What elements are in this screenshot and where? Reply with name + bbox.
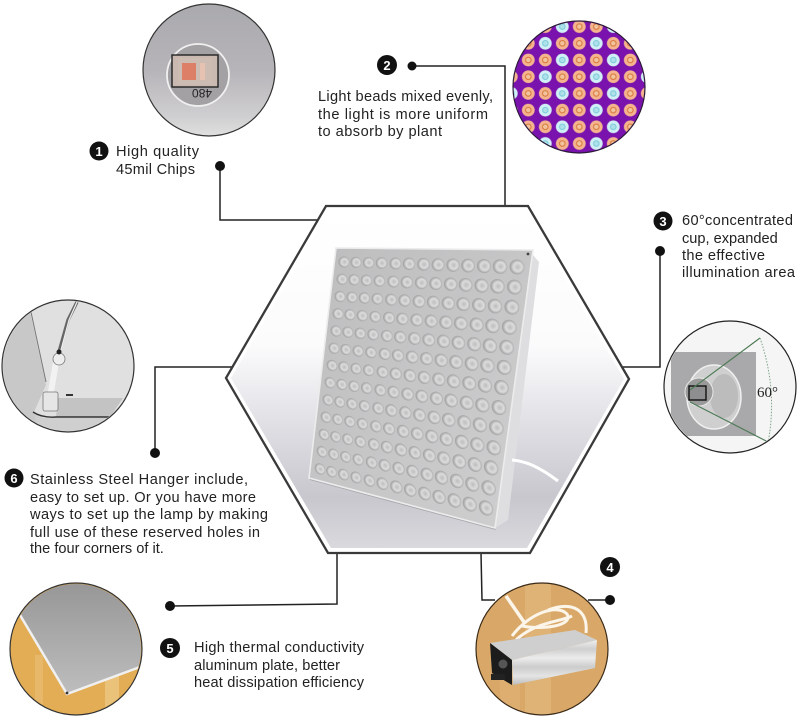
feature 2 text: Light beads mixed evenly, [318, 89, 493, 105]
feature 5 text: heat dissipation efficiency [194, 675, 365, 691]
feature 6 text [29, 472, 268, 557]
connector lines [155, 66, 660, 606]
number 2 badge [377, 55, 397, 75]
60 degree cup photo circle: 60° [757, 385, 778, 401]
feature 2 text: to absorb by plant [318, 124, 442, 140]
feature 6 text: ways to set up the lamp by making [29, 507, 268, 523]
central hexagon panel [226, 206, 629, 553]
number 6 badge: 6 [10, 471, 18, 486]
feature 3 text [682, 213, 796, 281]
feature 2 text: the light is more uniform [318, 107, 488, 123]
number 3 badge [654, 212, 672, 230]
number 3 badge: 3 [659, 214, 667, 229]
LED beads photo circle [513, 21, 645, 153]
feature 3 text: cup, expanded [682, 231, 778, 247]
feature 6 text: Stainless Steel Hanger include, [30, 472, 248, 488]
feature 1 text: 45mil Chips [116, 162, 195, 178]
number 5 badge: 5 [166, 641, 174, 656]
60 degree cup photo circle [664, 321, 796, 453]
connector dot 3 [655, 246, 665, 256]
LED grow light panel [309, 248, 558, 530]
feature 3 text: illumination area [682, 265, 796, 281]
connector dot 5 [165, 601, 175, 611]
feature 1 text: High quality [116, 144, 200, 160]
feature 6 text: full use of these reserved holes in [30, 525, 260, 541]
feature 6 text: the four corners of it. [30, 541, 164, 557]
chip photo circle: 480 [192, 86, 212, 100]
connector dot 1 [215, 161, 225, 171]
number 2 badge: 2 [383, 58, 391, 73]
number 4 badge: 4 [606, 560, 614, 575]
number 5 badge [160, 638, 180, 658]
feature 3 text: 60°concentrated [682, 213, 793, 229]
number 6 badge [4, 468, 24, 488]
feature 5 text: aluminum plate, better [194, 658, 340, 674]
feature 6 text: easy to set up. Or you have more [30, 490, 256, 506]
feature 1 text [116, 144, 200, 178]
aluminum plate photo circle [10, 575, 145, 715]
power driver photo circle [476, 580, 608, 718]
feature 5 text [194, 640, 365, 691]
number 4 badge [600, 557, 620, 577]
feature 5 text: High thermal conductivity [194, 640, 365, 656]
hanger photo circle [0, 300, 134, 440]
connector dot 2 [408, 62, 416, 70]
number 1 badge [90, 142, 108, 160]
feature 3 text: the effective [682, 248, 765, 264]
chip photo circle [143, 4, 275, 136]
number 1 badge: 1 [95, 144, 103, 159]
feature 2 text [318, 89, 493, 140]
connector dot 6 [150, 448, 160, 458]
connector dot 4 [605, 595, 615, 605]
